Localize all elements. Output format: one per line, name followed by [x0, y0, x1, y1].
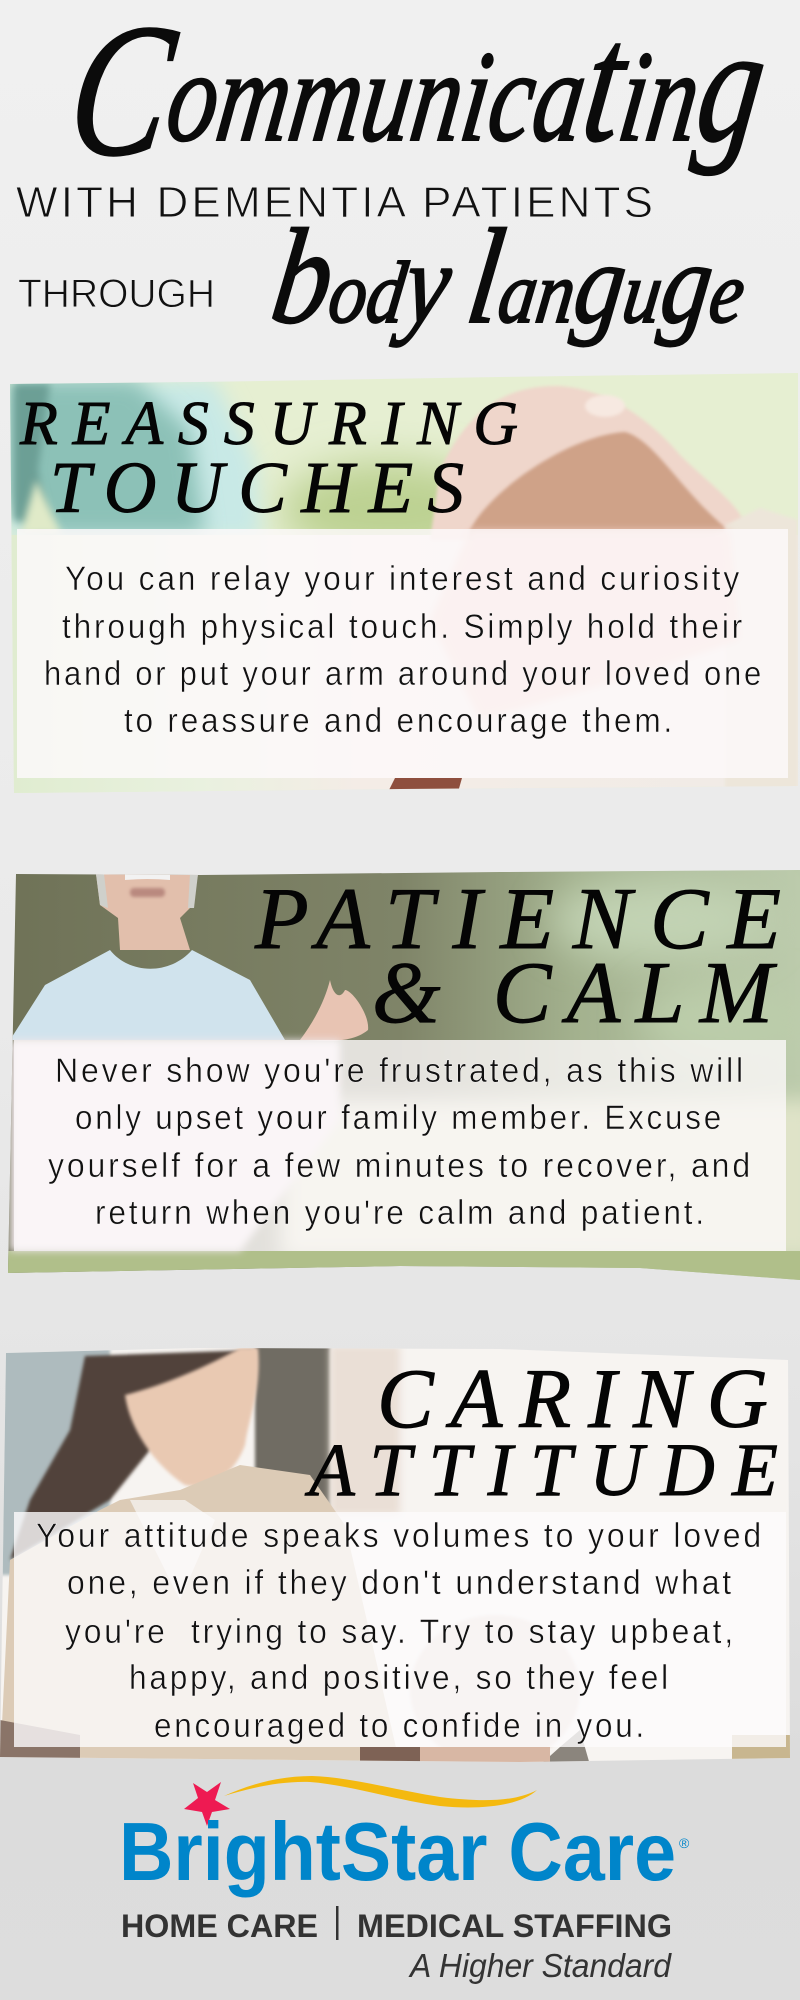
body text: Your attitude speaks volumes to your loved: [36, 1517, 764, 1555]
panel: reassuring touches: [0, 370, 800, 800]
text box: [14, 1512, 786, 1747]
heading: Communicating: ommunica: [159, 26, 595, 169]
tagline: a higher standard: A Higher Standard: [408, 1947, 673, 1984]
heading: patience and calm: & CALM: [372, 945, 778, 1042]
body text: You can relay your interest and curiosity: [65, 560, 742, 598]
icon: yellow swoosh: [224, 1776, 537, 1807]
heading: with dementia patients: WITH DEMENTIA PATIENTS: [16, 178, 653, 227]
heading: through: THROUGH: [18, 272, 215, 316]
heading: patience and calm: PATIENCE: [254, 871, 781, 968]
text box: [17, 529, 788, 778]
title: [16, 0, 778, 352]
heading: body languge: body languge: [264, 201, 757, 352]
body text: return when you're calm and patient.: [95, 1194, 707, 1232]
heading: reassuring touches: [19, 390, 518, 528]
wordmark: BrightStar Care: [119, 1805, 676, 1898]
icon: red star: [184, 1782, 230, 1826]
tagline: services: [121, 1906, 672, 1944]
registered mark: ®: [679, 1835, 690, 1851]
photo: hands on cane: [0, 370, 800, 800]
heading: caring attitude: [304, 1352, 778, 1512]
body text: [44, 560, 764, 740]
tagline: services: MEDICAL STAFFING: [357, 1908, 672, 1944]
body text: to reassure and encourage them.: [124, 702, 675, 740]
body text: yourself for a few minutes to recover, and: [48, 1147, 753, 1185]
panel: caring attitude: [0, 1345, 800, 1765]
tagline: services: HOME CARE: [121, 1908, 318, 1944]
heading: caring attitude: ATTITUDE: [304, 1429, 778, 1512]
photo: caregiver with patient: [0, 1345, 800, 1765]
heading: patience and calm: [254, 871, 781, 1042]
text box: [14, 1040, 786, 1251]
body text: Never show you're frustrated, as this will: [55, 1052, 746, 1090]
body text: one, even if they don't understand what: [67, 1564, 734, 1602]
logo: BrightStar Care: [119, 1776, 690, 1984]
body text: through physical touch. Simply hold their: [62, 608, 745, 646]
body text: encouraged to confide in you.: [154, 1707, 647, 1745]
body text: happy, and positive, so they feel: [129, 1659, 671, 1697]
body text: you're trying to say. Try to stay upbeat,: [65, 1613, 736, 1651]
heading: caring attitude: CARING: [377, 1352, 768, 1446]
body text: only upset your family member. Excuse: [75, 1099, 724, 1137]
heading: reassuring touches: TOUCHES: [50, 447, 464, 528]
photo: woman meditating: [0, 865, 800, 1286]
panel: patience and calm: [0, 865, 800, 1286]
body text: [36, 1517, 764, 1745]
body text: [48, 1052, 753, 1232]
heading: reassuring touches: REASSURING: [19, 390, 518, 458]
